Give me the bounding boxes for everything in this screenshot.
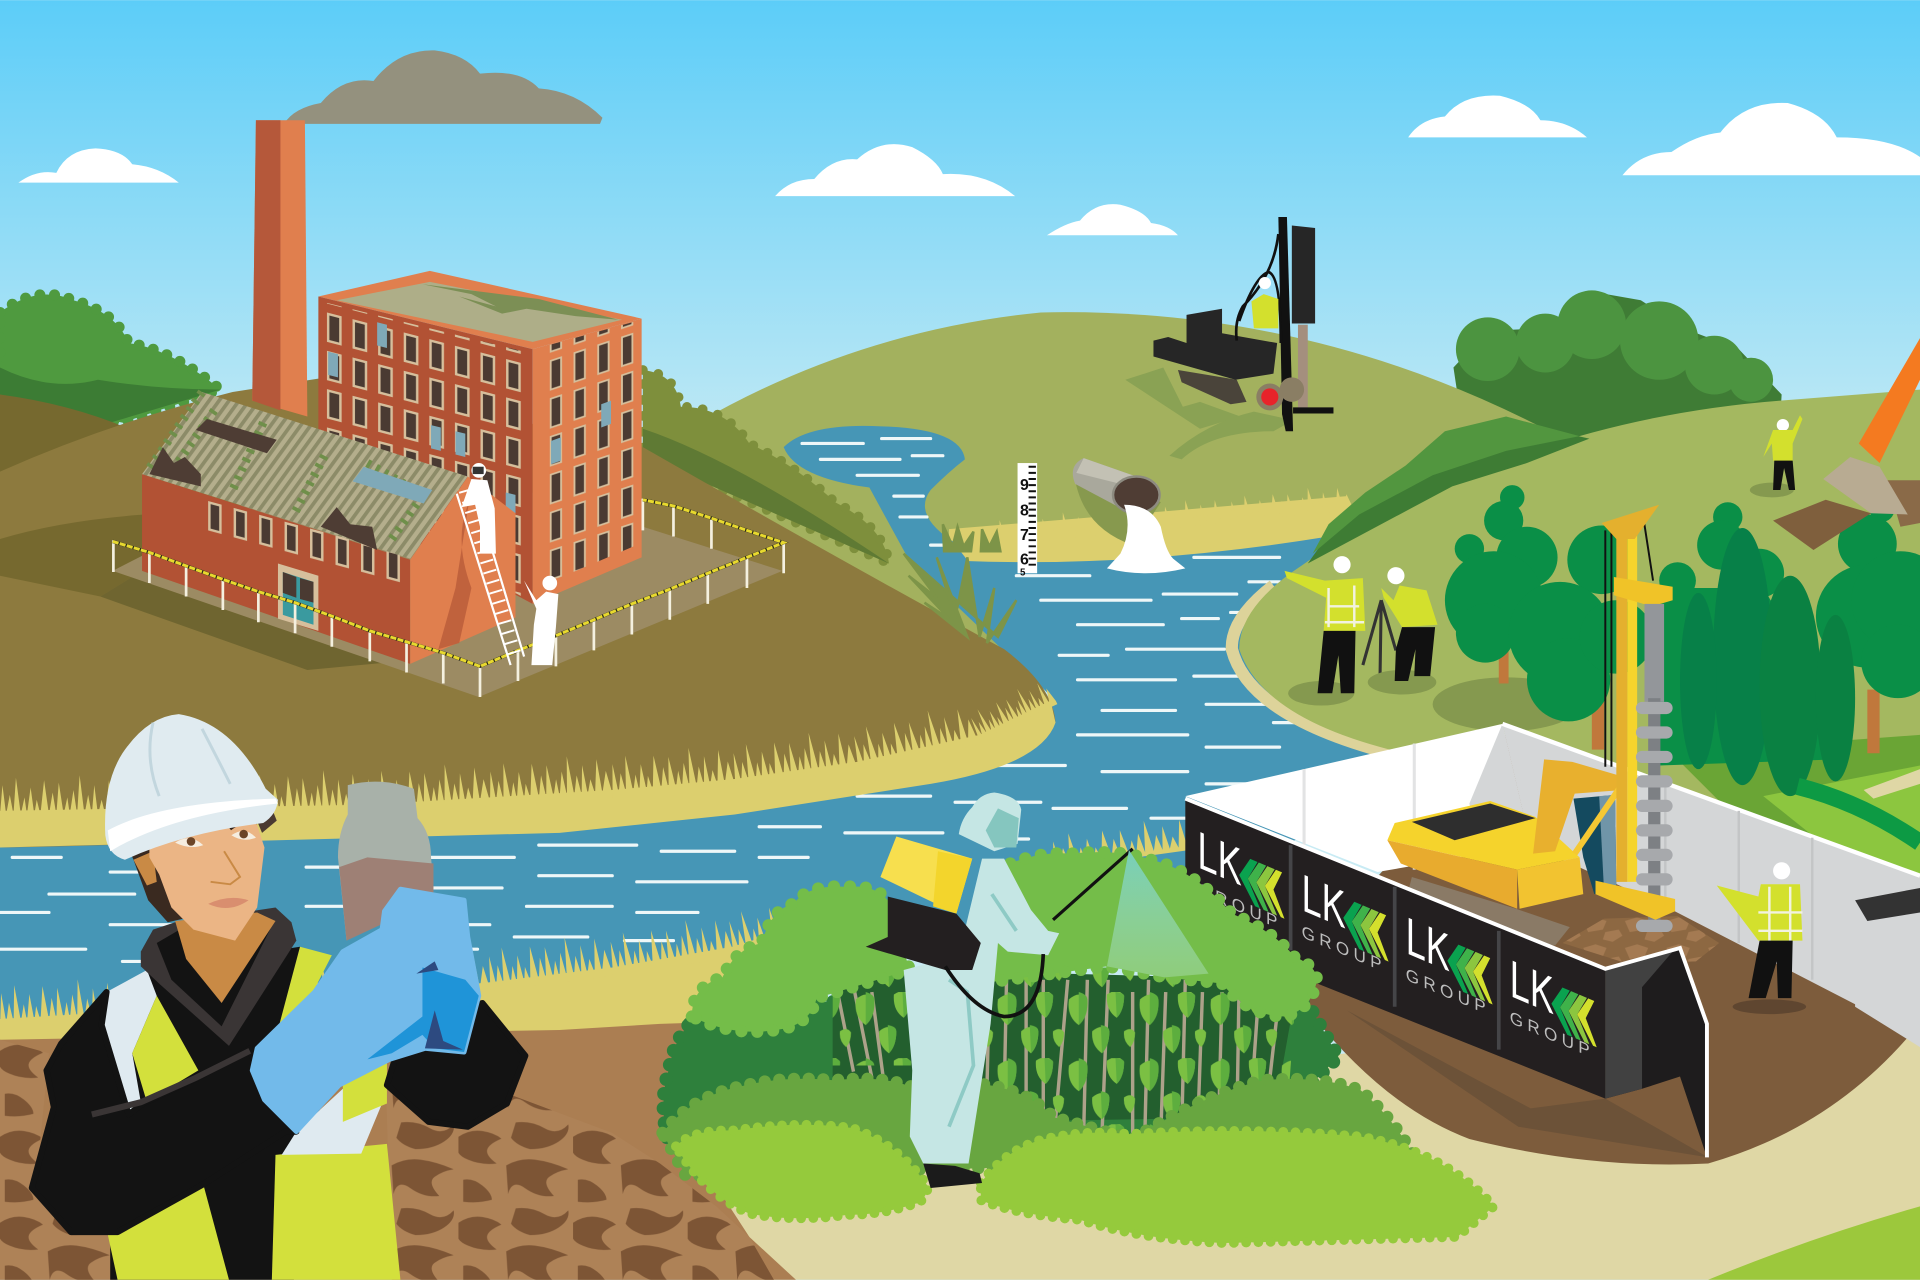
mast highlight bbox=[1627, 527, 1637, 882]
right tree belt bbox=[1433, 485, 1920, 894]
LK logo 3: GROUP bbox=[1406, 964, 1490, 1019]
gable ladder shadow bbox=[438, 502, 471, 649]
bright front bush right bbox=[981, 1131, 1494, 1243]
left back hill bbox=[0, 394, 135, 484]
mid green bush bbox=[662, 1079, 1414, 1176]
safety fence bbox=[113, 499, 784, 697]
far worker bbox=[1750, 415, 1802, 497]
LK logo 4: GROUP bbox=[1510, 1007, 1594, 1062]
sleeve fold bbox=[92, 1051, 250, 1114]
rig cables bbox=[1605, 517, 1653, 767]
hat brim bbox=[108, 799, 278, 851]
knotweed leaves bbox=[833, 968, 1298, 1133]
backpack side bbox=[933, 851, 972, 914]
backpack sprayer bbox=[880, 837, 972, 914]
hood shade bbox=[986, 808, 1019, 848]
body side bbox=[1517, 857, 1583, 909]
reed clumps bbox=[904, 524, 1016, 643]
vest upper left white bbox=[102, 970, 157, 1114]
door bbox=[278, 563, 318, 631]
operative spraying knotweed bbox=[866, 792, 1133, 1188]
rig tracks bbox=[1178, 370, 1247, 404]
tree crowns bbox=[1445, 485, 1920, 766]
dirt patch bbox=[1773, 500, 1871, 550]
wall edge bbox=[1185, 799, 1707, 1157]
surveyor right bbox=[1368, 567, 1438, 694]
spoil heap bbox=[1562, 916, 1719, 964]
eyes bbox=[175, 830, 256, 847]
LK logo 1: GROUP bbox=[1198, 879, 1282, 934]
spare container bbox=[1855, 888, 1920, 1047]
black deck bbox=[1412, 803, 1536, 840]
hedge beside factory hill bbox=[643, 370, 889, 563]
site worker with clipboard bbox=[1717, 862, 1806, 1014]
lower yellow bank bbox=[0, 931, 833, 1053]
hill shade bbox=[0, 514, 144, 597]
rig wheels bbox=[1256, 377, 1304, 410]
LK logo 1: LK bbox=[1198, 819, 1242, 897]
water level gauge: 7 bbox=[1020, 527, 1029, 544]
jar sample bbox=[339, 857, 433, 941]
front hoarding wall bbox=[1185, 799, 1707, 1157]
tape yellow bbox=[113, 500, 784, 666]
low mill building bbox=[142, 392, 516, 664]
track bbox=[1408, 877, 1570, 946]
auger rod bbox=[1644, 604, 1664, 702]
return wall bbox=[1605, 948, 1707, 1157]
surveying tripod bbox=[1363, 600, 1396, 679]
LK logo 3 bbox=[1406, 905, 1493, 1021]
spray lance bbox=[1053, 849, 1133, 920]
knotweed dark centre bbox=[833, 968, 1298, 1121]
grass blades on upper bank bbox=[0, 676, 1057, 819]
factory hill shadow bbox=[100, 571, 413, 670]
spray cone bbox=[1107, 850, 1209, 977]
back hedge left bbox=[0, 294, 220, 423]
water level gauge bbox=[1018, 463, 1037, 579]
roof bbox=[318, 271, 642, 349]
jar glass bbox=[338, 782, 433, 941]
sky background bbox=[0, 0, 1920, 478]
roof moss bbox=[422, 284, 618, 320]
far grass bank bbox=[949, 484, 1353, 571]
barrier tape bbox=[113, 500, 784, 666]
eyebrows bbox=[164, 822, 257, 843]
LK logo 2: GROUP bbox=[1302, 922, 1386, 977]
cab brace bbox=[1575, 784, 1622, 854]
trunks bbox=[1499, 649, 1880, 753]
pond and stream bbox=[784, 426, 980, 576]
lips bbox=[208, 898, 249, 908]
bank edge of right lawn bbox=[1232, 586, 1390, 753]
vest lower left bbox=[108, 1184, 229, 1280]
excavation floor bbox=[1286, 735, 1920, 1164]
face bbox=[149, 803, 264, 941]
wall face bbox=[1185, 799, 1605, 1099]
vest upper left lime bbox=[132, 996, 198, 1102]
lower ground bbox=[0, 1023, 796, 1280]
hard hat bbox=[105, 714, 278, 860]
hoarding shadow bbox=[1347, 1010, 1708, 1157]
roof hole left bbox=[149, 447, 201, 486]
excavator arm bbox=[1773, 338, 1920, 550]
LK logo 4: LK bbox=[1510, 948, 1554, 1026]
orange boom bbox=[1859, 338, 1920, 463]
torso bbox=[110, 947, 321, 1280]
hat ridge bbox=[150, 723, 230, 796]
hose bbox=[945, 954, 1043, 1017]
tracked excavator bbox=[1387, 759, 1622, 946]
driven post bbox=[1298, 325, 1308, 413]
vest neck strip bbox=[279, 947, 332, 1025]
smoke cloud bbox=[284, 50, 602, 124]
rig foot bbox=[1596, 881, 1675, 920]
jacket inner collar bbox=[157, 921, 274, 1026]
central hill bbox=[698, 312, 1592, 649]
ear bbox=[133, 851, 157, 886]
corrugated roof bbox=[142, 392, 468, 559]
blue glove bbox=[252, 889, 479, 1132]
gravel pile left bbox=[0, 1040, 116, 1280]
cypress trees bbox=[1680, 528, 1772, 785]
factory site ground bbox=[113, 441, 782, 697]
under brim shade bbox=[250, 796, 277, 833]
river bbox=[0, 537, 1390, 1029]
scientist with sample jar bbox=[32, 714, 525, 1280]
nose bbox=[211, 851, 240, 884]
return wall shade bbox=[1605, 952, 1673, 1099]
dark knotweed backing bush bbox=[663, 1001, 1338, 1139]
ladder bbox=[457, 485, 524, 665]
vest lower right bbox=[272, 1144, 400, 1280]
cab glass bbox=[1573, 795, 1616, 894]
bright green corner bbox=[1708, 1206, 1920, 1280]
clouds bbox=[18, 95, 1920, 235]
LK logo 2 bbox=[1302, 862, 1389, 978]
hair bbox=[125, 822, 184, 922]
protective suit bbox=[904, 859, 1059, 1163]
LK logo 2: LK bbox=[1302, 862, 1346, 940]
left wall bbox=[318, 297, 533, 604]
LK logo 4 bbox=[1510, 948, 1597, 1063]
neck bbox=[175, 912, 276, 1003]
body top bbox=[1387, 801, 1580, 870]
piling rig on hilltop bbox=[1153, 217, 1333, 431]
glove dark fold bbox=[416, 961, 463, 1050]
gravel pile centre bbox=[386, 1078, 774, 1280]
tree shadow bbox=[1433, 677, 1580, 731]
river ripples bbox=[0, 439, 1322, 961]
body front bbox=[1387, 840, 1517, 909]
bucket bbox=[1823, 457, 1908, 514]
right wall bbox=[533, 319, 642, 604]
roof window right bbox=[353, 467, 432, 503]
LK logo 1 bbox=[1198, 819, 1284, 935]
water level gauge: 9 bbox=[1020, 477, 1029, 494]
glove shade bbox=[367, 968, 479, 1059]
drop hammer box bbox=[1292, 226, 1315, 323]
auger collar bbox=[1614, 577, 1673, 606]
mast bbox=[1616, 527, 1627, 882]
knotweed stalks bbox=[835, 980, 1280, 1133]
worker on ladder bbox=[462, 463, 496, 554]
left windows bbox=[321, 301, 529, 600]
water level gauge: 6 bbox=[1020, 552, 1029, 569]
outfall water bbox=[1107, 505, 1185, 573]
tan path bbox=[686, 955, 1920, 1280]
surveyor left bbox=[1284, 556, 1365, 706]
boots bbox=[923, 1163, 982, 1188]
right hill bbox=[1239, 390, 1920, 894]
dirt pile bbox=[1887, 480, 1920, 527]
vest lime panel bbox=[343, 1061, 387, 1122]
rig foot bbox=[1293, 408, 1333, 413]
cab frame bbox=[1533, 759, 1622, 854]
rig body bbox=[1153, 309, 1277, 380]
cypress trees front bbox=[1760, 576, 1855, 796]
left arm bbox=[32, 992, 296, 1232]
back hedge right bbox=[1453, 290, 1782, 466]
auger screw bbox=[1642, 698, 1667, 931]
bright front bush left bbox=[676, 1125, 928, 1218]
factory hill bbox=[0, 379, 1056, 848]
knotweed light foliage right bbox=[981, 852, 1317, 1017]
right windows bbox=[547, 321, 637, 583]
vest white panel bbox=[282, 1089, 382, 1155]
hood collar bbox=[141, 908, 296, 1046]
rig hoses bbox=[1236, 234, 1281, 343]
rig mast bbox=[1278, 217, 1293, 431]
outfall pipe bbox=[1073, 458, 1160, 514]
roof inner bbox=[337, 282, 622, 342]
yellow bank bbox=[0, 701, 1056, 848]
low hedge bbox=[1798, 786, 1920, 843]
chimney bbox=[252, 120, 307, 417]
gable wall bbox=[410, 477, 516, 664]
right arm bbox=[387, 1003, 525, 1127]
backpack base bbox=[866, 897, 981, 970]
cab light pane bbox=[1599, 795, 1616, 892]
lawn under trees bbox=[1671, 735, 1920, 894]
rig ground shadow bbox=[1125, 368, 1293, 459]
grass behind hoarding bbox=[1049, 814, 1200, 869]
water level gauge: 8 bbox=[1020, 503, 1029, 520]
hood bbox=[959, 792, 1021, 851]
tall mill building bbox=[318, 271, 642, 604]
broken panes bbox=[328, 322, 611, 557]
roof window left bbox=[196, 419, 277, 453]
roof hole right bbox=[321, 507, 377, 550]
LK logo 3: LK bbox=[1406, 905, 1450, 983]
knotweed light foliage left bbox=[692, 886, 910, 1032]
front wall bbox=[142, 474, 410, 664]
mast cap bbox=[1602, 505, 1659, 539]
rig operator bbox=[1251, 277, 1278, 328]
panel joints bbox=[1291, 845, 1499, 1050]
auger drilling rig bbox=[1596, 505, 1675, 931]
enclosure inner walls bbox=[1185, 724, 1920, 1029]
water level gauge: 5 bbox=[1020, 568, 1026, 579]
front windows bbox=[206, 495, 404, 600]
worker on ground bbox=[524, 576, 558, 665]
suit folds bbox=[949, 894, 1016, 1127]
pipe shadow bbox=[1074, 463, 1161, 545]
hedge on right hill bbox=[1308, 417, 1589, 563]
roof moss bbox=[147, 392, 422, 539]
fence posts bbox=[113, 499, 784, 697]
grass blades on lower bank bbox=[0, 887, 854, 1028]
